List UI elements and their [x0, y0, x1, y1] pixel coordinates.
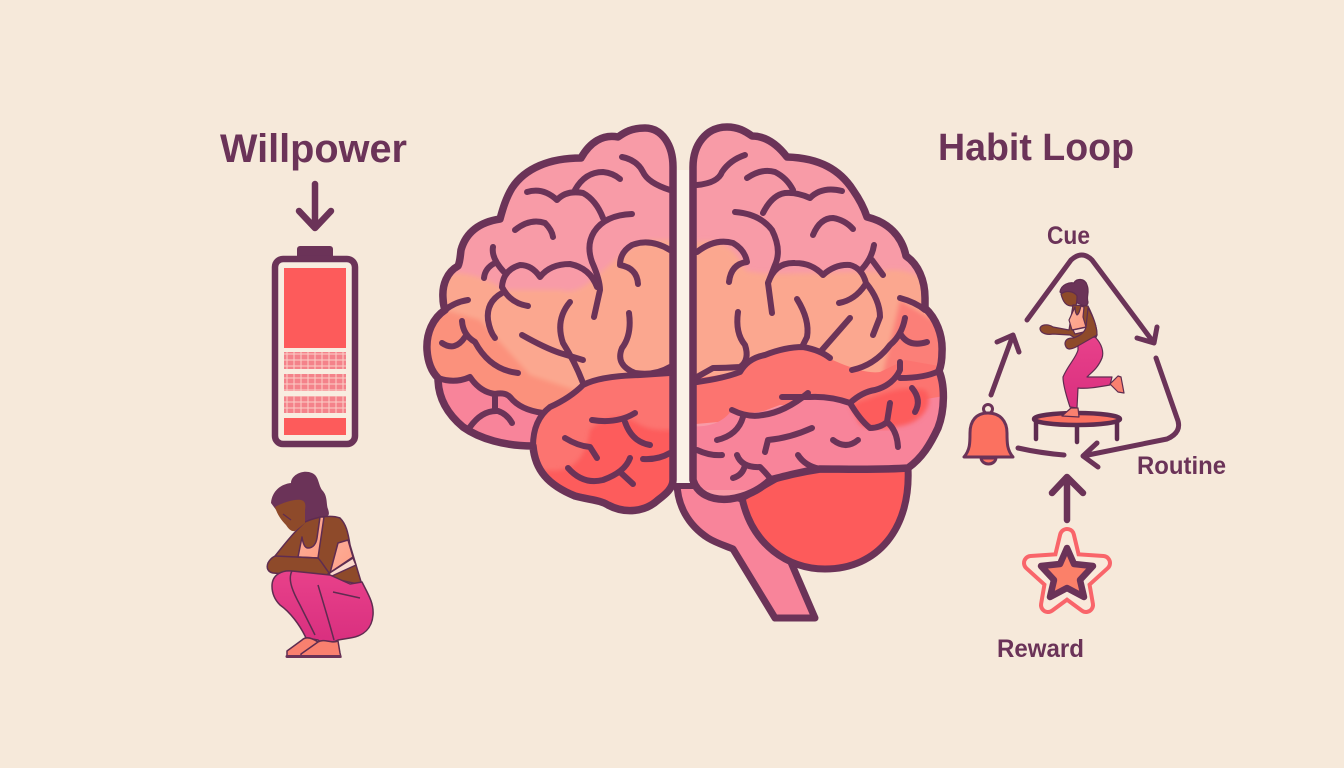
- label: Reward: Reward: [997, 635, 1084, 663]
- label: Routine: Routine: [1137, 452, 1226, 480]
- icon: depleting battery: [275, 246, 355, 444]
- central fissure: [676, 170, 690, 485]
- title: Habit Loop: Habit Loop: [938, 127, 1134, 169]
- right hemisphere: [685, 115, 955, 510]
- figure: exhausted crouching woman: [267, 472, 373, 657]
- fissure base: [673, 483, 693, 489]
- brain: complete illustration: [410, 110, 955, 618]
- diagram: habit loop arrows: [991, 255, 1179, 467]
- label: Cue: Cue: [1047, 222, 1090, 250]
- right sulci: [697, 155, 939, 478]
- arrow: down to battery: [299, 184, 331, 228]
- cerebellum: [742, 465, 908, 569]
- icon: reward star: [1031, 536, 1103, 605]
- brainstem: [677, 482, 815, 618]
- arrow: reward up to loop: [1052, 477, 1083, 520]
- left sulci: [438, 157, 670, 484]
- icon: trampoline: [1034, 413, 1120, 442]
- title: Willpower: Willpower: [220, 127, 407, 171]
- figure: woman jumping: [1040, 279, 1124, 417]
- icon: bell: [964, 404, 1013, 464]
- infographic canvas: [220, 123, 1226, 658]
- left hemisphere: [423, 124, 677, 514]
